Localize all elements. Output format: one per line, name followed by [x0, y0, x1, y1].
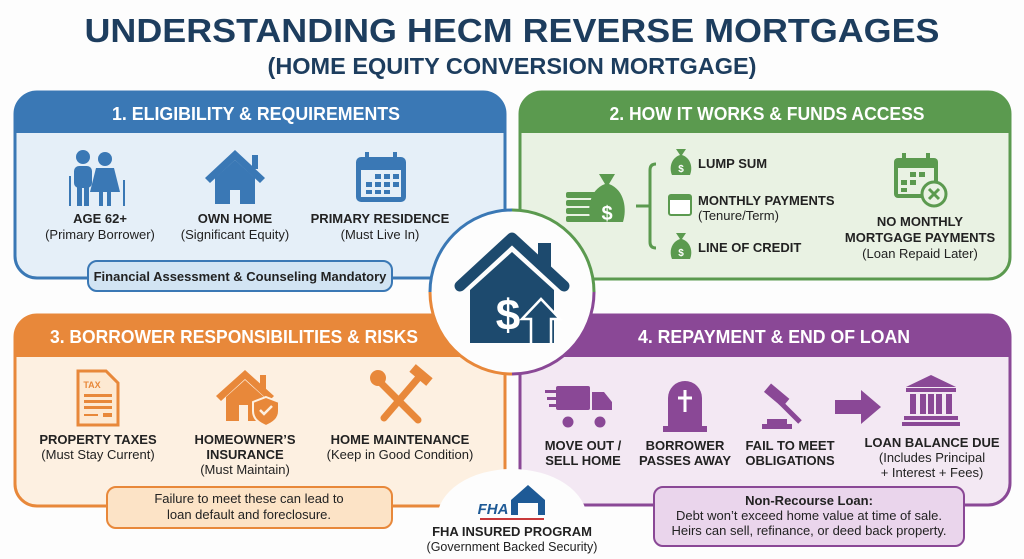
callout: non-recourse: Heirs can sell, refinance, or deed back property.	[671, 523, 947, 538]
panel: how it works	[520, 92, 1010, 279]
arrow	[835, 390, 881, 424]
panel: repayment: + Interest + Fees)	[881, 465, 983, 480]
heading: repayment: 4. REPAYMENT & END OF LOAN	[638, 327, 910, 347]
icon: FHA logo	[478, 485, 545, 520]
subtitle: (HOME EQUITY CONVERSION MORTGAGE)	[268, 53, 756, 79]
text: homeowner's insurance: HOMEOWNER’S	[194, 432, 296, 447]
icon: gravestone	[663, 381, 707, 432]
icon: money bag with cash: $	[601, 203, 613, 225]
item: line of credit	[671, 233, 801, 259]
panel: repayment: PASSES AWAY	[639, 453, 731, 468]
panel: responsibilities: (Must Stay Current)	[41, 447, 155, 462]
text: no monthly payments: NO MONTHLY	[877, 214, 963, 229]
icon: tools	[378, 376, 420, 420]
heading: responsibilities: 3. BORROWER RESPONSIBILITIES & RISKS	[50, 327, 418, 347]
icon: FHA logo: FHA	[478, 501, 508, 518]
icon: calendar with x	[894, 153, 946, 206]
icon: gavel	[762, 383, 800, 429]
text: home maintenance: HOME MAINTENANCE	[331, 432, 470, 447]
item: line of credit: $	[678, 248, 684, 259]
callout: failure	[107, 487, 392, 528]
icon: center house with dollar: $	[496, 291, 520, 340]
panel: repayment: SELL HOME	[545, 453, 621, 468]
icon: calendar	[356, 152, 406, 202]
panel: repayment: (Includes Principal	[879, 450, 985, 465]
text: FHA insured program: FHA INSURED PROGRAM	[432, 524, 592, 539]
item: line of credit: LINE OF CREDIT	[698, 240, 801, 255]
text: loan balance due: LOAN BALANCE DUE	[864, 435, 1000, 450]
icon: truck	[545, 386, 612, 429]
text: fail to meet: FAIL TO MEET	[745, 438, 835, 453]
text: move out: MOVE OUT /	[545, 438, 622, 453]
text: primary residence: PRIMARY RESIDENCE	[311, 211, 450, 226]
text: age: AGE 62+	[73, 211, 127, 226]
title: UNDERSTANDING HECM REVERSE MORTGAGES	[84, 12, 940, 49]
callout: counseling: Financial Assessment & Counseling Mandatory	[94, 269, 387, 284]
callout: non-recourse	[654, 487, 964, 546]
icon: center house with dollar	[460, 238, 564, 343]
item: monthly payments	[669, 193, 835, 223]
panel: responsibilities	[15, 315, 505, 528]
panel: responsibilities: INSURANCE	[206, 447, 284, 462]
panel: how it works: (Loan Repaid Later)	[862, 246, 978, 261]
icon: house	[205, 150, 265, 204]
panel: responsibilities: (Must Maintain)	[200, 462, 290, 477]
panel: how it works: MORTGAGE PAYMENTS	[845, 230, 995, 245]
item: monthly payments: MONTHLY PAYMENTS	[698, 193, 835, 208]
item: lump sum: $	[678, 164, 684, 175]
callout: non-recourse: Debt won’t exceed home value at time of sale.	[676, 508, 942, 523]
icon: money bag with cash	[566, 174, 625, 225]
panel: responsibilities: (Keep in Good Condition)	[327, 447, 473, 462]
item: monthly payments: (Tenure/Term)	[698, 208, 779, 223]
icon: tax form: TAX	[83, 380, 101, 390]
callout: failure: Failure to meet these can lead to	[154, 491, 344, 506]
text: borrower passes away: BORROWER	[646, 438, 725, 453]
panel: eligibility: (Significant Equity)	[181, 227, 289, 242]
icon: elderly couple	[69, 150, 125, 206]
panel: eligibility	[15, 92, 505, 291]
panel: eligibility: (Must Live In)	[341, 227, 419, 242]
callout: counseling	[88, 261, 392, 291]
icon: bank	[902, 375, 960, 426]
text: own home: OWN HOME	[198, 211, 273, 226]
panel: repayment	[520, 315, 1010, 546]
callout: failure: loan default and foreclosure.	[167, 507, 331, 522]
icon: house with shield	[216, 370, 279, 426]
text: property taxes: PROPERTY TAXES	[39, 432, 157, 447]
bottom cutout	[437, 469, 587, 559]
panel: eligibility: (Primary Borrower)	[45, 227, 155, 242]
connector bracket	[636, 164, 656, 248]
panel: repayment: OBLIGATIONS	[745, 453, 835, 468]
callout: non-recourse: Non-Recourse Loan:	[745, 493, 873, 508]
heading: eligibility: 1. ELIGIBILITY & REQUIREMENTS	[112, 104, 400, 124]
center cutout ring	[430, 210, 594, 374]
icon: tax form	[78, 371, 118, 425]
item: lump sum: LUMP SUM	[698, 156, 767, 171]
item: lump sum	[671, 149, 767, 175]
text: (Government Backed Security)	[427, 540, 597, 554]
heading: how it works: 2. HOW IT WORKS & FUNDS ACCESS	[610, 104, 924, 124]
